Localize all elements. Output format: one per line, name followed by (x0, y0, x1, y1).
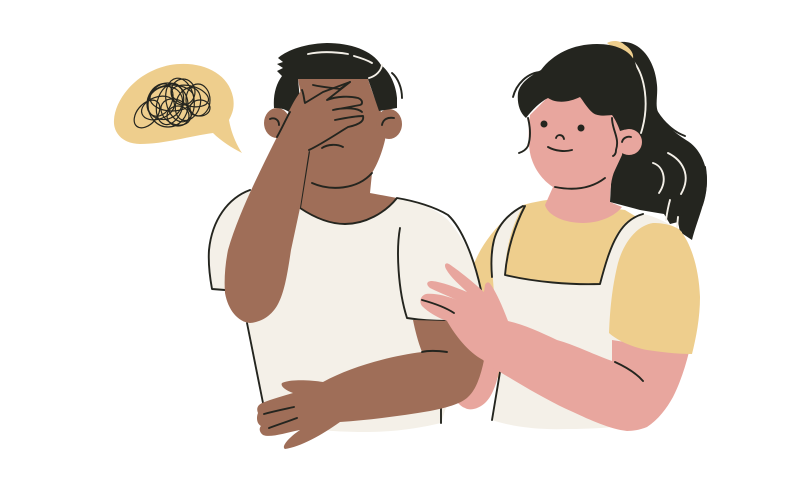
woman (473, 41, 707, 429)
finger lines (277, 82, 363, 150)
t-shirt (209, 190, 482, 432)
neck and face (298, 79, 397, 224)
ears (264, 108, 402, 139)
folded arm lines (264, 351, 447, 428)
head hair (518, 44, 642, 131)
man (209, 43, 500, 449)
woman's far hand behind arm (458, 355, 500, 409)
face lines (300, 145, 481, 290)
apron (492, 206, 682, 429)
hair strands (633, 61, 706, 227)
folded arm and hand (257, 320, 484, 449)
woman's comforting arm and hand (420, 223, 700, 431)
yellow shirt back (473, 200, 660, 390)
hair highlights (308, 52, 402, 98)
arm lines (422, 300, 643, 381)
hair (274, 43, 397, 112)
ponytail hair (610, 42, 707, 240)
face details (513, 72, 617, 189)
speech bubble with tangled scribble (114, 64, 242, 153)
ear (616, 129, 642, 155)
yellow hair tie (607, 41, 633, 59)
yellow sleeve (609, 223, 700, 354)
raised arm and hand covering face (225, 82, 364, 323)
shirt outlines (209, 190, 447, 423)
apron outline (491, 206, 643, 420)
neck and face (529, 85, 630, 223)
